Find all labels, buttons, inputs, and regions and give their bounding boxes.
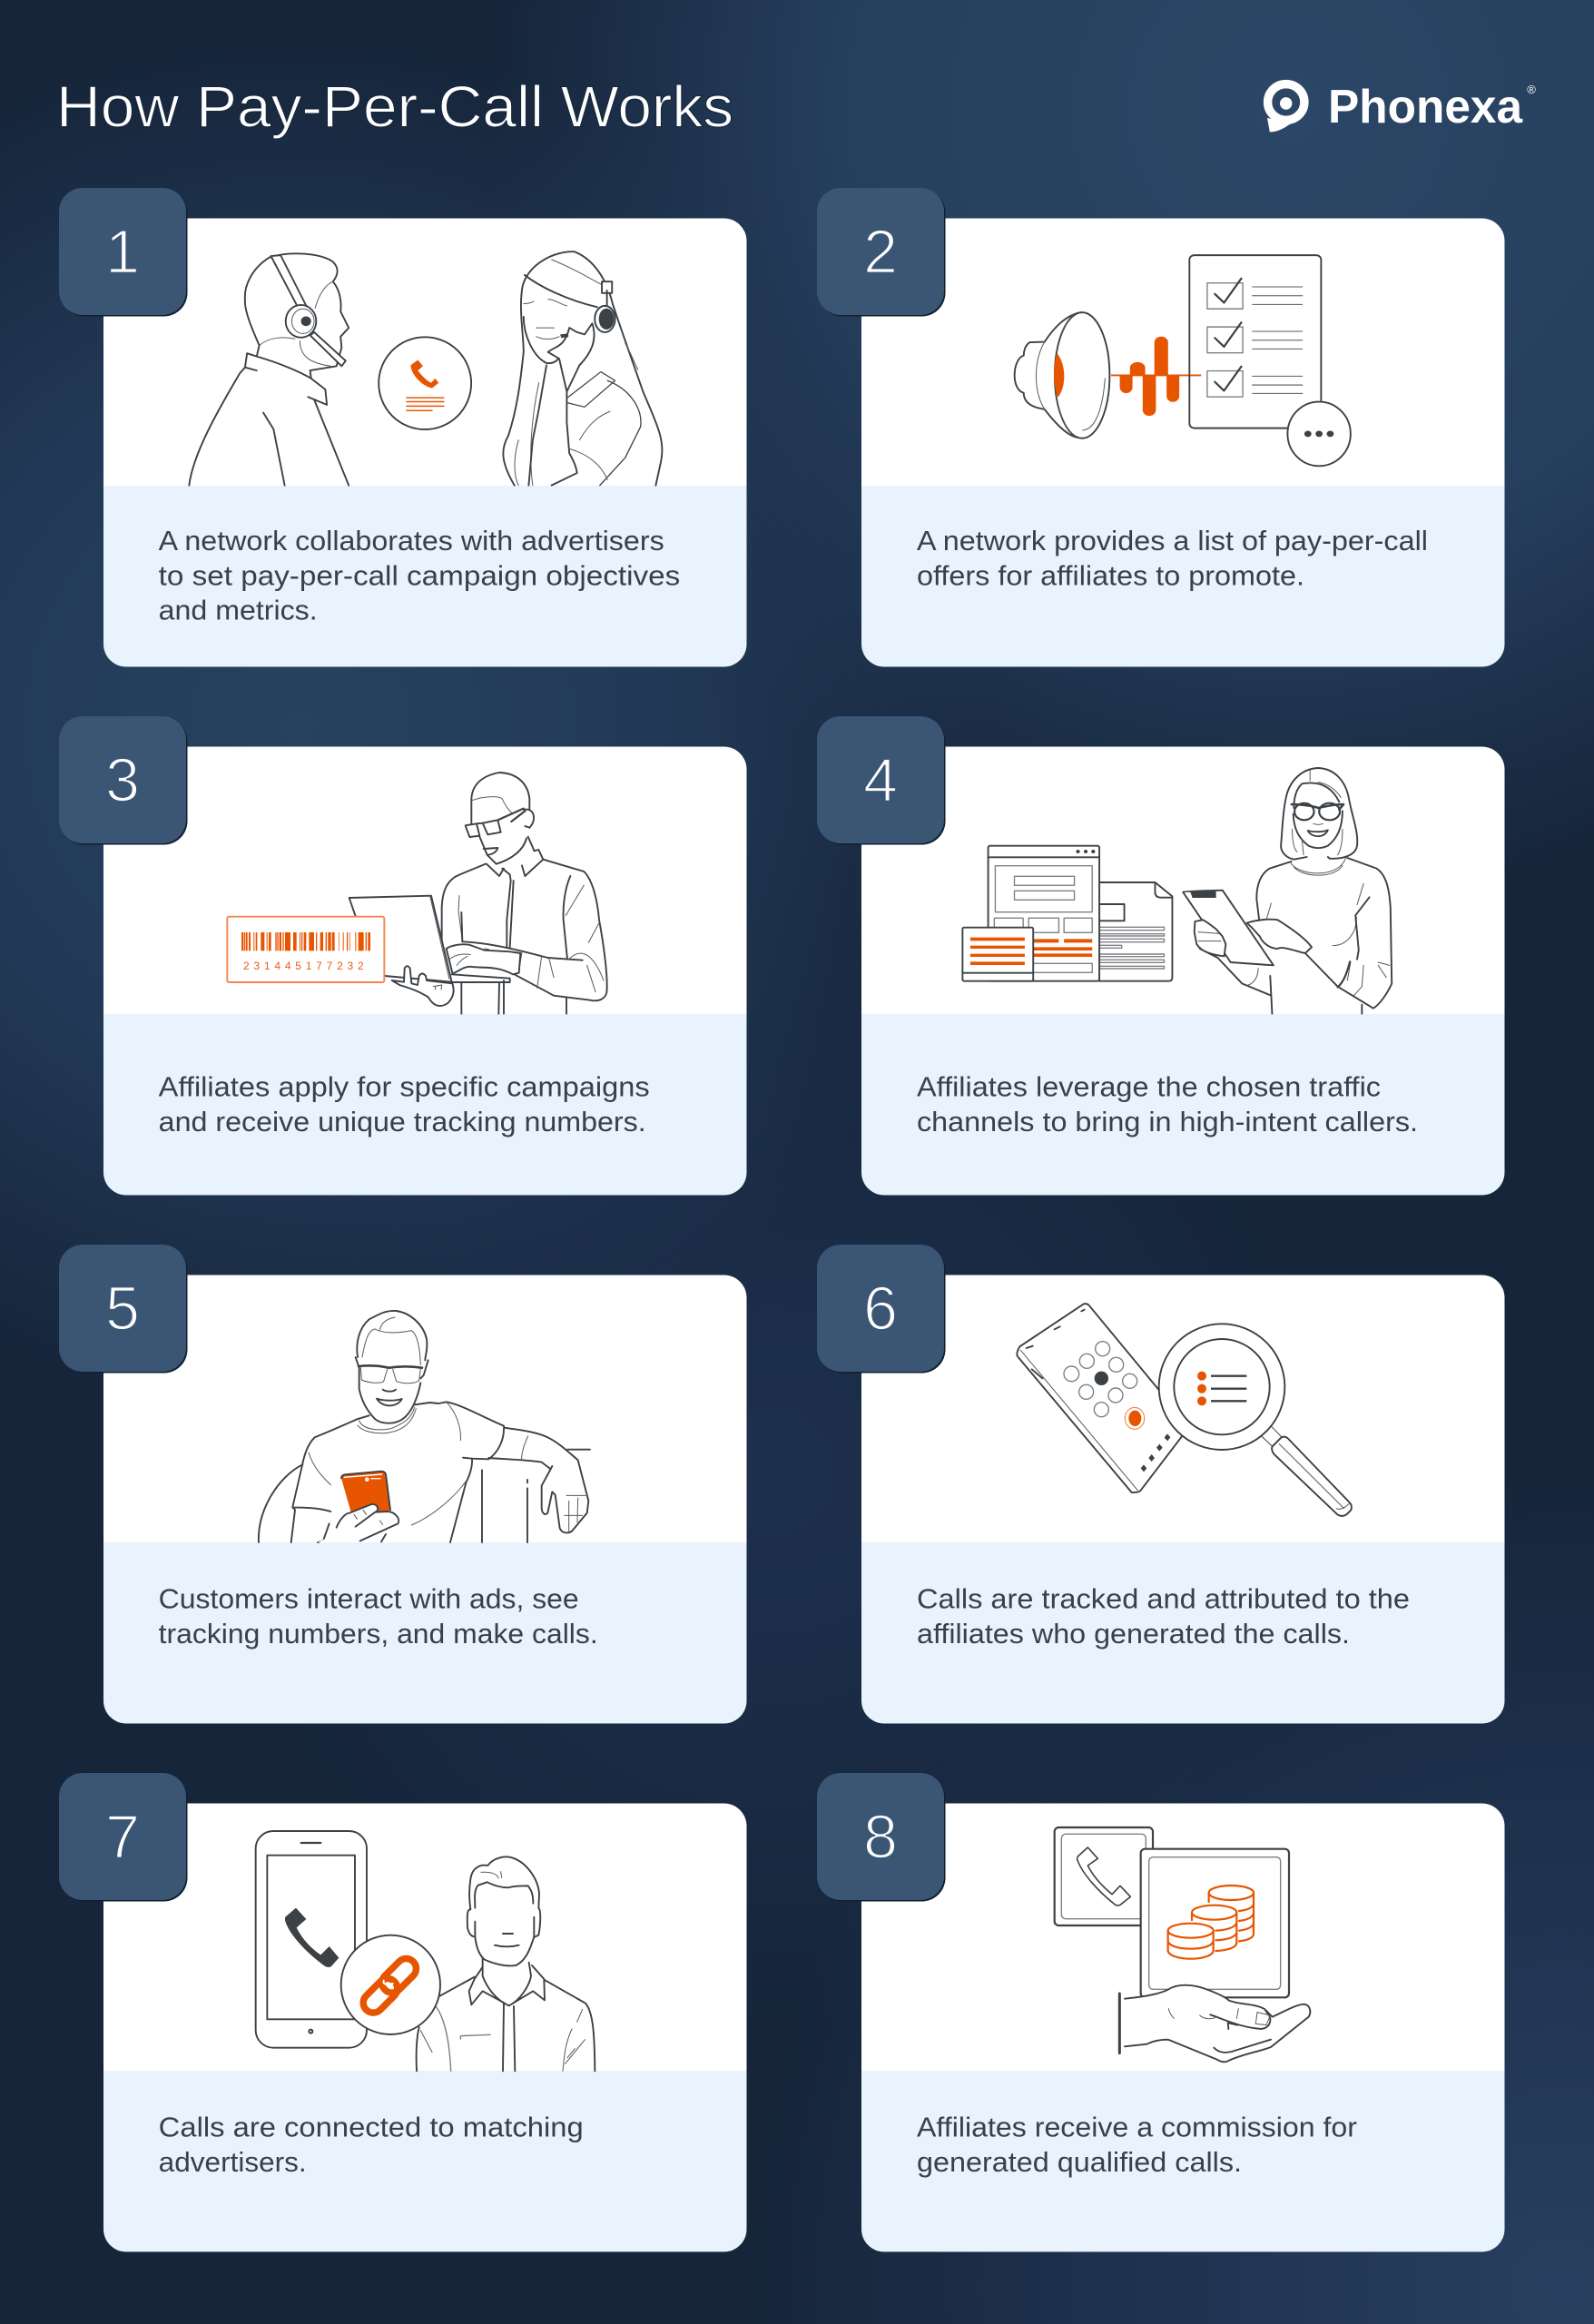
logo: Phonexa	[1267, 81, 1536, 133]
card background	[861, 1803, 1505, 2251]
illustration: speaker, waveform and checklist	[1015, 255, 1351, 466]
panel: step 5	[59, 1245, 746, 1723]
badge: number 2	[817, 188, 946, 316]
card background	[103, 1275, 746, 1723]
chain link circle	[341, 1935, 440, 2034]
magnifier	[1159, 1324, 1352, 1516]
orange text panel	[962, 928, 1033, 981]
description	[917, 1583, 1410, 1649]
badge: number 5: 5	[105, 1275, 140, 1344]
description: and receive unique tracking numbers.	[159, 1106, 646, 1137]
man	[442, 773, 607, 1014]
phone tile	[1055, 1827, 1153, 1925]
card background	[861, 218, 1505, 666]
speaker	[1015, 312, 1109, 438]
card background	[861, 746, 1505, 1195]
checklist	[1189, 255, 1351, 466]
description	[159, 1071, 650, 1137]
illustration: phone keypad and magnifier	[1017, 1304, 1352, 1516]
smartphone	[256, 1831, 367, 2048]
badge: number 8: 8	[863, 1803, 898, 1872]
illustration: man with laptop and tracking barcode	[227, 773, 607, 1014]
description: generated qualified calls.	[917, 2146, 1242, 2178]
description: A network provides a list of pay-per-call	[917, 525, 1428, 556]
card background	[103, 746, 746, 1195]
man	[417, 1856, 595, 2071]
document sheet	[1099, 882, 1172, 981]
woman	[1183, 768, 1392, 1014]
description	[159, 2112, 584, 2178]
woman with headset	[503, 251, 662, 486]
panel: step 4	[817, 716, 1505, 1195]
coins tile	[1141, 1849, 1289, 1997]
description: Calls are tracked and attributed to the	[917, 1583, 1410, 1614]
badge: number 8	[817, 1773, 946, 1901]
orange phone	[341, 1472, 390, 1528]
panel: step 8	[817, 1773, 1505, 2251]
description: tracking numbers, and make calls.	[159, 1618, 598, 1649]
title: How Pay-Per-Call Works	[56, 74, 733, 140]
description	[917, 1071, 1418, 1137]
description: to set pay-per-call campaign objectives	[159, 559, 680, 592]
badge: number 6	[817, 1245, 946, 1373]
barcode card	[227, 917, 384, 982]
illustration: call tile, coins tile and open hand	[1055, 1827, 1310, 2062]
description	[917, 2112, 1357, 2178]
badge: number 6: 6	[863, 1275, 898, 1344]
panel: step 1	[59, 188, 746, 666]
description: Customers interact with ads, see	[159, 1583, 579, 1614]
wordmark: Phonexa	[1328, 81, 1523, 133]
badge: number 3	[59, 716, 187, 844]
browser window	[989, 846, 1099, 981]
illustration: phone, chain link and advertiser	[256, 1831, 595, 2071]
phone circle	[379, 337, 471, 429]
description: Calls are connected to matching	[159, 2112, 584, 2142]
registered mark: ®	[1527, 83, 1536, 96]
description: Affiliates apply for specific campaigns	[159, 1071, 650, 1102]
description: A network collaborates with advertisers	[159, 525, 664, 556]
description: and metrics.	[159, 594, 318, 626]
badge: number 1	[59, 188, 187, 316]
card background	[861, 1275, 1505, 1723]
laptop	[349, 896, 510, 982]
description: advertisers.	[159, 2146, 307, 2178]
description: affiliates who generated the calls.	[917, 1618, 1350, 1649]
illustration: two call agents with phone icon	[189, 251, 662, 486]
badge: number 4	[817, 716, 946, 844]
panel: step 3	[59, 716, 746, 1195]
description	[159, 1583, 598, 1649]
hands	[392, 944, 520, 1006]
hand	[318, 1504, 398, 1542]
description: channels to bring in high-intent callers.	[917, 1106, 1418, 1137]
panel: step 7	[59, 1773, 746, 2251]
barcode card: 2 3 1 4 4 5 1 7 7 2 3 2	[243, 960, 364, 972]
waveform	[1111, 337, 1201, 416]
illustration: woman with tablet and web pages	[962, 768, 1392, 1014]
badge: number 7: 7	[105, 1803, 140, 1872]
badge: number 1: 1	[105, 218, 140, 287]
man on sofa	[259, 1311, 590, 1542]
badge: number 2: 2	[863, 218, 898, 287]
panel: step 2	[817, 188, 1505, 666]
icon: speech-bubble pin	[1267, 84, 1304, 132]
description: offers for affiliates to promote.	[917, 559, 1304, 592]
badge: number 3: 3	[105, 746, 140, 815]
open hand	[1119, 1985, 1310, 2062]
man with headset	[189, 253, 349, 486]
illustration: customer holding orange phone	[259, 1311, 590, 1542]
description: Affiliates leverage the chosen traffic	[917, 1071, 1381, 1102]
badge: number 4: 4	[863, 746, 898, 815]
card background	[103, 218, 746, 666]
card background	[103, 1803, 746, 2251]
badge: number 5	[59, 1245, 187, 1373]
description: Affiliates receive a commission for	[917, 2112, 1357, 2142]
badge: number 7	[59, 1773, 187, 1901]
description	[917, 525, 1428, 592]
description	[159, 525, 680, 626]
phone	[1017, 1304, 1183, 1492]
panel: step 6	[817, 1245, 1505, 1723]
